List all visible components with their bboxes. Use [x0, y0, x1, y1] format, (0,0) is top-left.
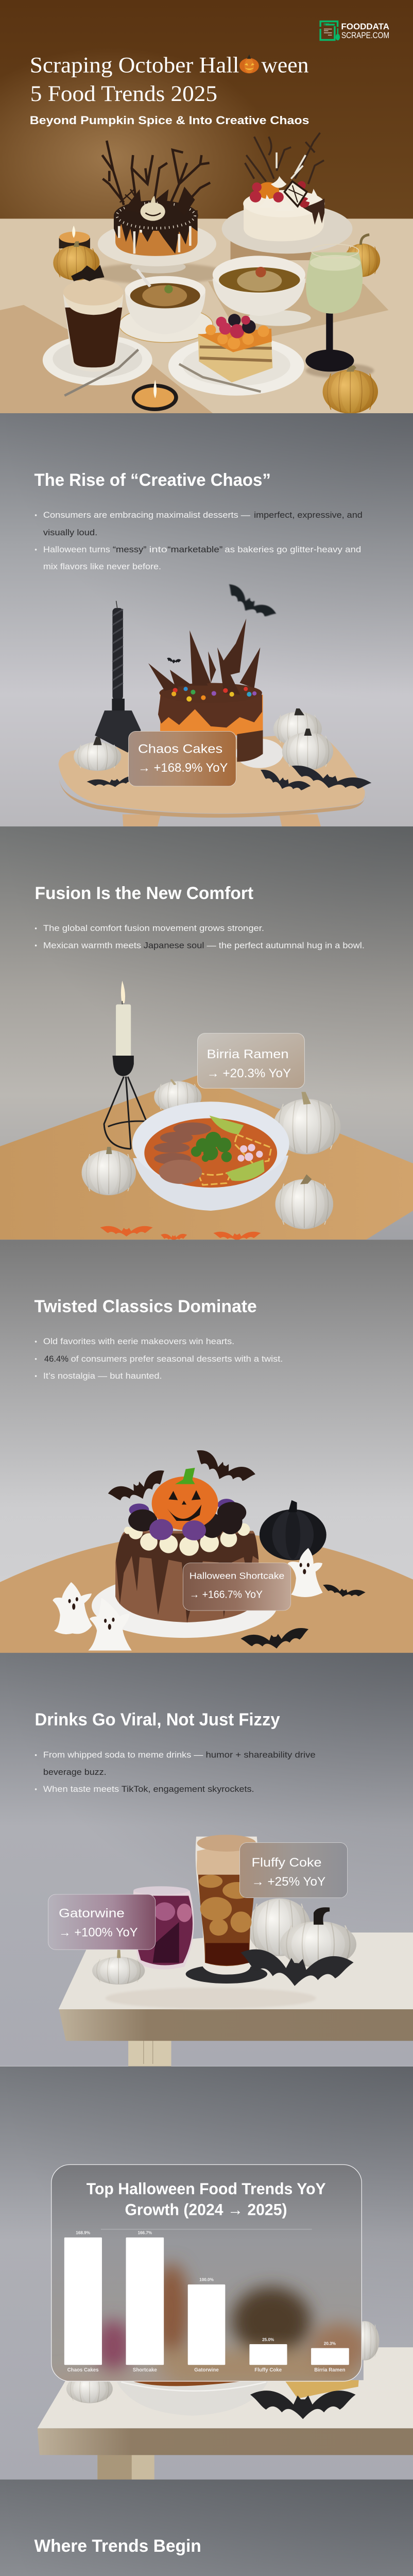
bullet list: into [149, 545, 167, 554]
candle: black twisted [95, 601, 141, 753]
panel: rise of creative chaos [0, 413, 413, 826]
bullet list: visually loud. [43, 528, 97, 537]
icon: jack-o-lantern [239, 56, 259, 73]
callout: gatorwine: → +100% YoY [59, 1926, 138, 1940]
pumpkin: bottom right [323, 365, 378, 414]
pumpkin: small [66, 2375, 113, 2403]
bowl: stew [119, 269, 213, 343]
bar chart: 100.0% [199, 2278, 214, 2282]
bowl [116, 2380, 269, 2416]
bullet list: The global comfort fusion movement grows stronger. [43, 924, 264, 933]
bullet list: Mexican warmth meets [43, 941, 141, 950]
table cloth [0, 218, 413, 414]
cake: halloween shortcake [107, 1448, 259, 1623]
heading: Twisted Classics Dominate [34, 1297, 257, 1316]
bullet list: TikTok, engagement skyrockets. [122, 1785, 254, 1794]
callout: fluffy coke [239, 1843, 348, 1898]
callout: gatorwine [48, 1894, 156, 1950]
heading: Where Trends Begin [34, 2536, 201, 2556]
plate and coffee glass [43, 265, 152, 396]
bullet list [35, 511, 363, 571]
pumpkin: left [53, 241, 99, 280]
chart title [87, 2179, 326, 2218]
bullet list [35, 1751, 316, 1794]
bat [250, 2391, 356, 2419]
coaster [186, 1964, 267, 1984]
table [0, 1533, 413, 1654]
bar chart: Shortcake [133, 2367, 157, 2373]
callout: birria ramen [198, 1033, 304, 1088]
bar chart: Birria Ramen [314, 2367, 346, 2373]
cake: white drip [222, 133, 352, 260]
panel: fusion comfort [0, 826, 413, 1242]
subtitle: Beyond Pumpkin Spice & Into Creative Chaos [30, 114, 309, 127]
title: 5 Food Trends 2025 [30, 81, 217, 106]
callout: chaos cakes [129, 731, 236, 786]
bullet list [35, 924, 365, 950]
title: Scraping October Hall [30, 52, 239, 77]
bullet list: of consumers prefer seasonal desserts with a twist. [71, 1354, 283, 1364]
table [59, 733, 366, 826]
bowl: noodle soup [213, 256, 311, 326]
panel: yoy growth chart [0, 2066, 413, 2481]
bullet list: From whipped soda to meme drinks — [43, 1751, 203, 1760]
bar chart [64, 2229, 349, 2373]
callout: fluffy coke: Fluffy Coke [251, 1856, 322, 1870]
panel: twisted classics [0, 1240, 413, 1654]
drink: green glass [305, 244, 363, 371]
plate and layer cake slice [168, 314, 304, 396]
ghosts [53, 1548, 323, 1651]
cake: dark chocolate branches [98, 141, 216, 274]
cake: chocolate shards [148, 619, 283, 768]
heading: Fusion Is the New Comfort [35, 884, 253, 903]
callout: chaos cakes: → +168.9% YoY [138, 761, 228, 775]
callout: gatorwine: Gatorwine [59, 1906, 125, 1920]
heading: Drinks Go Viral, Not Just Fizzy [35, 1710, 280, 1730]
bullet list: “marketable” [167, 545, 222, 554]
panel: drinks go viral [0, 1653, 413, 2066]
bar chart: Gatorwine [194, 2367, 219, 2373]
bullet list: 46.4% [44, 1354, 68, 1364]
drink: fluffy coke glass [196, 1835, 257, 1975]
table [0, 1075, 413, 1240]
bat: paper [238, 1948, 354, 1991]
bullet list: mix flavors like never before. [43, 562, 161, 571]
bar chart: 168.9% [76, 2231, 91, 2235]
table [59, 1933, 413, 2066]
logo: FoodData Scrape: SCRAPE.COM [341, 30, 389, 40]
callout: birria ramen: → +20.3% YoY [207, 1066, 291, 1080]
chart card [51, 2165, 369, 2389]
callout: halloween shortcake: Halloween Shortcake [190, 1570, 284, 1581]
bullet list: beverage buzz. [43, 1768, 107, 1777]
bat: flying [222, 582, 277, 625]
bullet list: “messy” [113, 545, 146, 554]
callout: halloween shortcake [183, 1563, 291, 1611]
bar chart: 166.7% [137, 2231, 152, 2235]
logo: FoodData Scrape: FOODDATA [341, 22, 389, 31]
bar chart: Fluffy Coke [254, 2367, 282, 2373]
pumpkin: right [345, 235, 380, 277]
bar chart: 20.3% [324, 2342, 336, 2346]
cake slice behind [284, 2380, 359, 2399]
orange paper bats [100, 1226, 261, 1242]
pumpkin: black [260, 1500, 326, 1560]
plate [92, 1574, 277, 1638]
bar chart: 25.0% [262, 2337, 274, 2342]
pumpkins: white [82, 1079, 340, 1229]
chart title: Growth (2024 → 2025) [125, 2200, 287, 2218]
bullet list: humor + shareability drive [205, 1751, 316, 1760]
bullet list: It’s nostalgia — but haunted. [43, 1371, 162, 1381]
panel: where trends begin [0, 2480, 413, 2576]
panel: hero [0, 0, 413, 414]
pumpkin: large white behind [248, 1899, 311, 1956]
bats: paper on table [87, 764, 372, 797]
bullet list: — the perfect autumnal hug in a bowl. [207, 941, 365, 950]
bullet list [35, 1337, 283, 1381]
bullet list: When taste meets [43, 1785, 119, 1794]
bowl: birria ramen [132, 1101, 289, 1211]
bullet list: as bakeries go glitter-heavy and [225, 545, 361, 554]
bats: on table [240, 1584, 366, 1653]
bullet list: Halloween turns [43, 545, 110, 554]
pumpkins: white [92, 1907, 356, 1985]
table [38, 2347, 413, 2481]
chart title: Top Halloween Food Trends YoY [87, 2179, 326, 2198]
candle with wire stand [104, 981, 146, 1149]
pumpkins: white [74, 708, 333, 771]
callout: birria ramen: Birria Ramen [207, 1047, 289, 1061]
candle: top left [59, 226, 90, 248]
bullet list: imperfect, expressive, and [254, 511, 363, 520]
pumpkin: right behind card [350, 2321, 380, 2361]
drink: purple glass [133, 1886, 194, 1970]
callout: chaos cakes: Chaos Cakes [138, 742, 222, 756]
title [30, 52, 309, 106]
logo: FoodData Scrape [320, 22, 389, 40]
heading: The Rise of “Creative Chaos” [34, 470, 271, 490]
bullet list: Consumers are embracing maximalist desserts — [43, 511, 251, 520]
bar chart: Chaos Cakes [67, 2367, 99, 2373]
bullet list: Japanese soul [144, 941, 204, 950]
bat: small [166, 657, 181, 665]
bullet list: Old favorites with eerie makeovers win hearts. [43, 1337, 234, 1346]
callout: halloween shortcake: → +166.7% YoY [190, 1589, 263, 1601]
candle: bottom [132, 380, 178, 411]
callout: fluffy coke: → +25% YoY [251, 1875, 325, 1889]
title: ween [261, 52, 309, 77]
